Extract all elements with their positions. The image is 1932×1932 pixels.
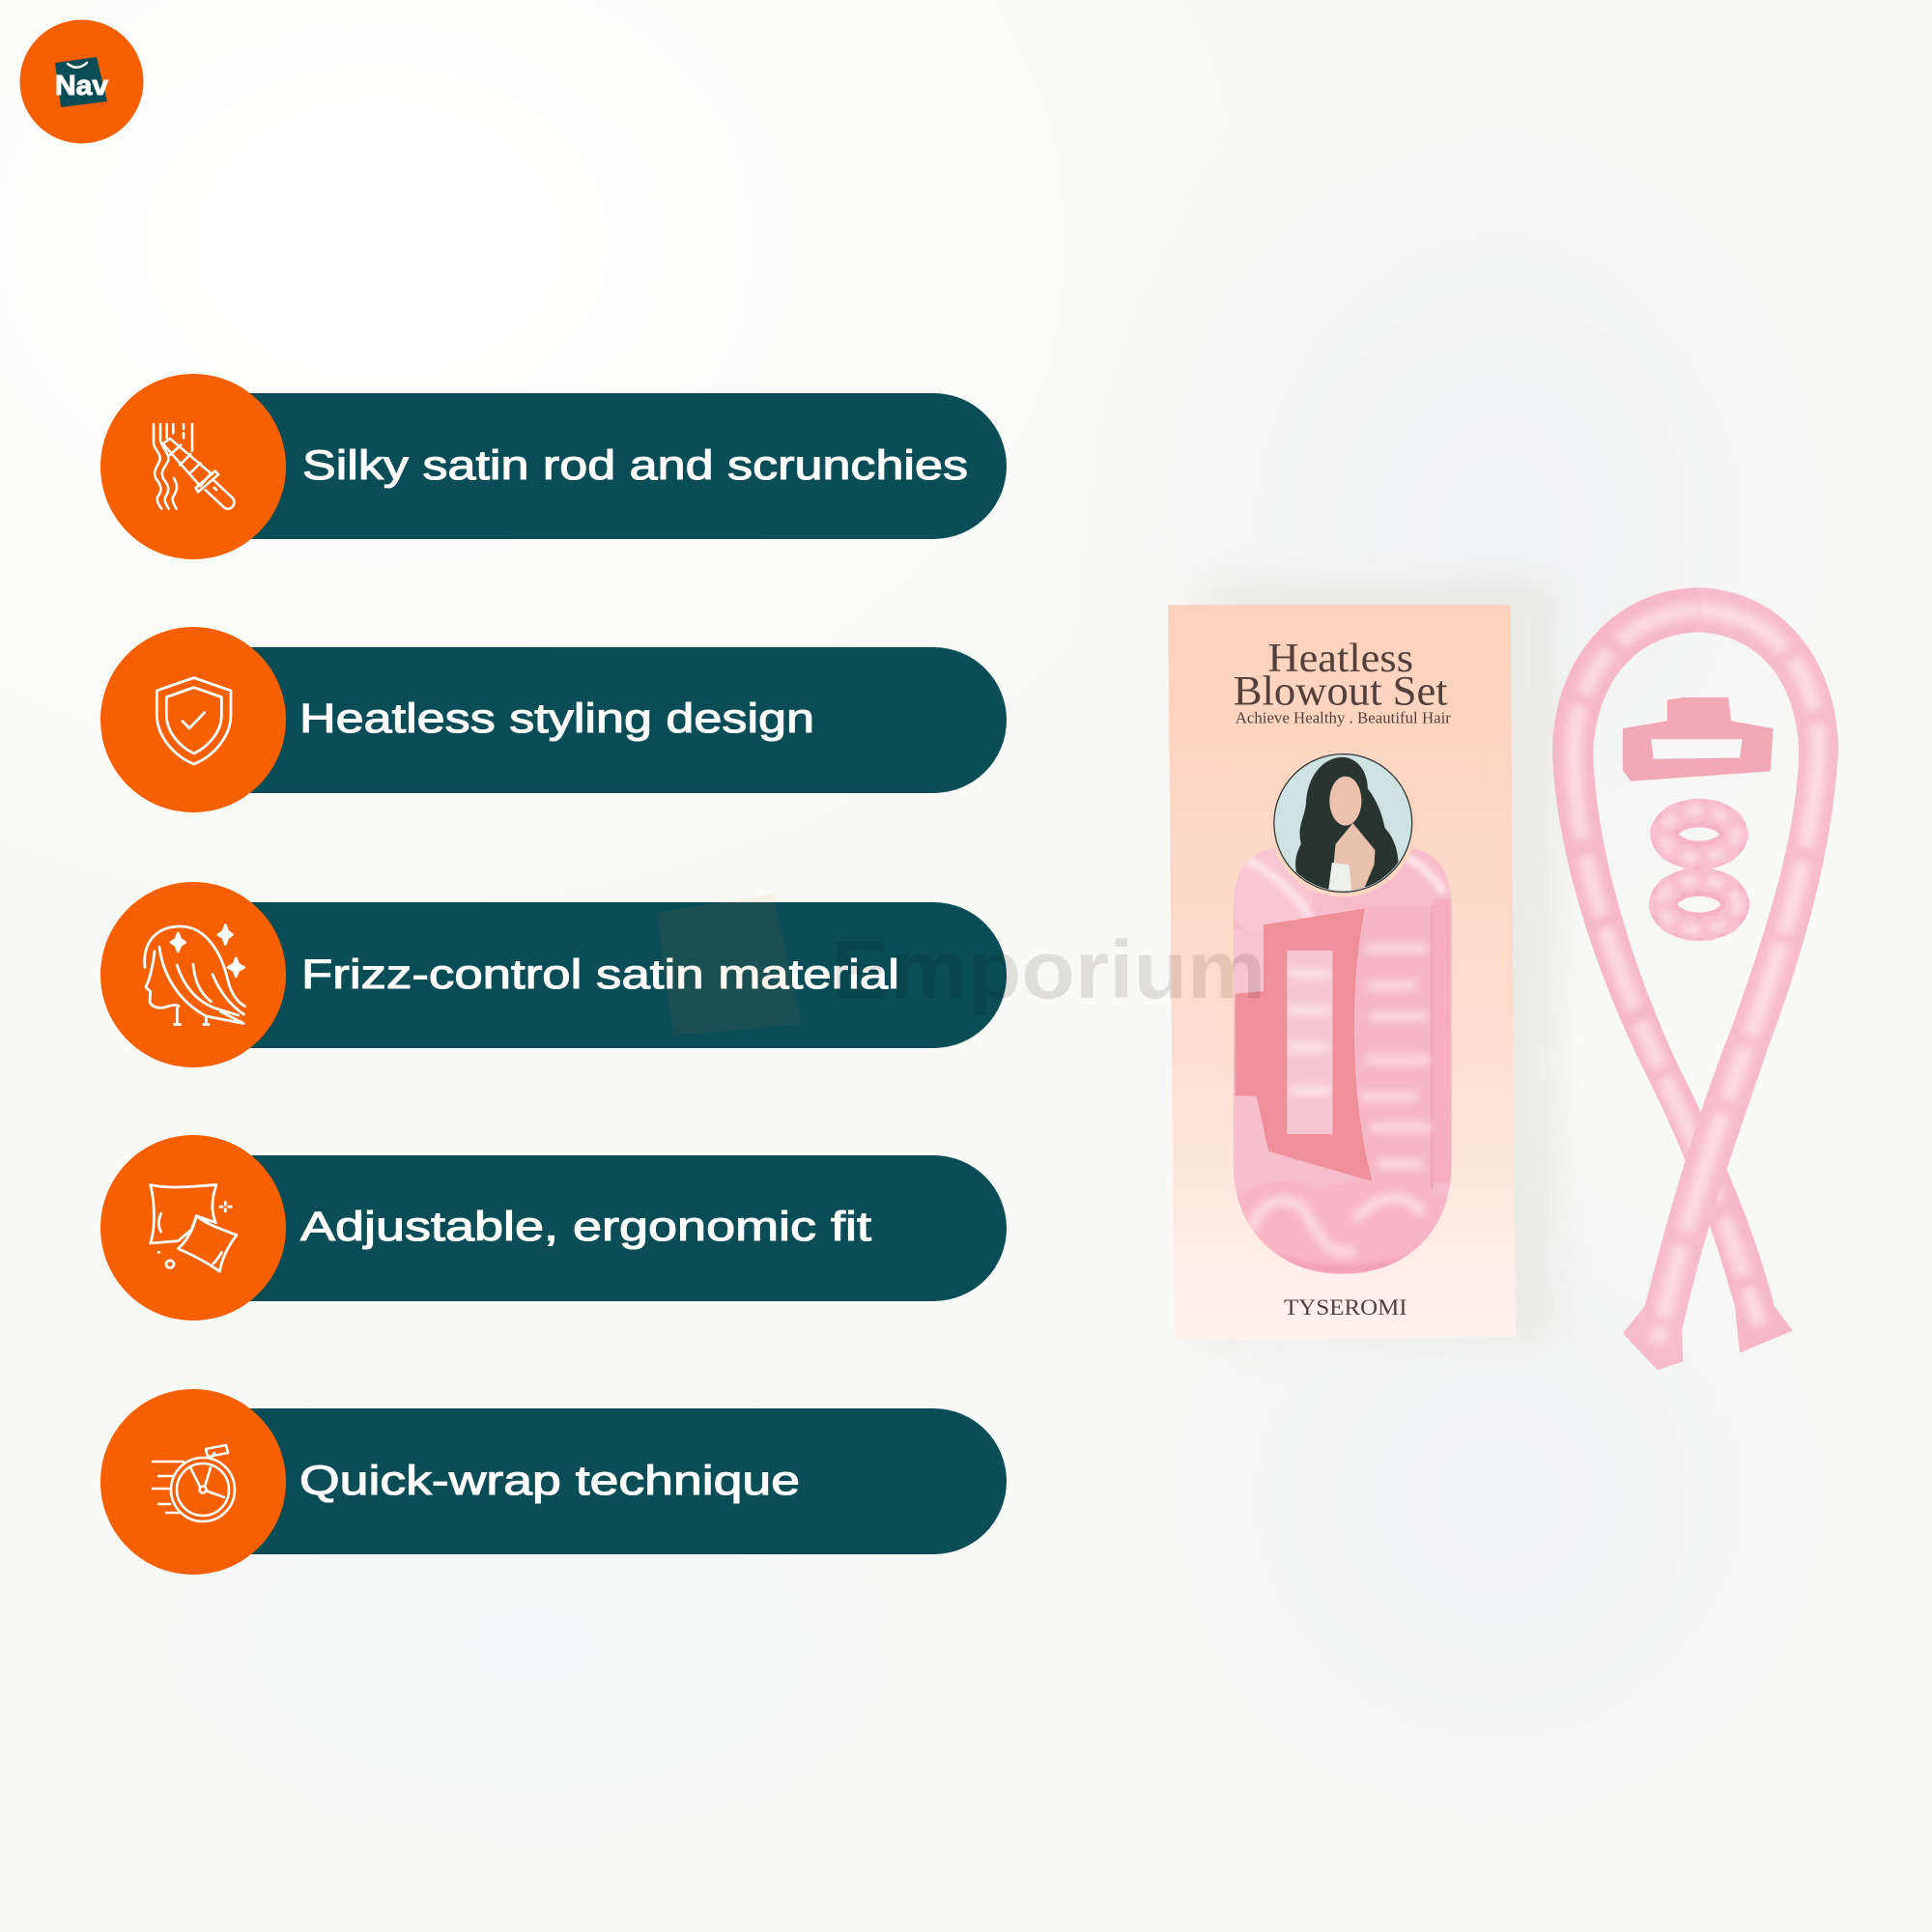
icon: curling rod with wavy hair	[154, 424, 234, 509]
pill bar	[174, 393, 1007, 539]
watermark bag	[657, 894, 802, 1036]
orange circle	[100, 1135, 286, 1321]
left strand	[1552, 587, 1793, 1352]
heading text: Frizz-control satin material	[301, 952, 899, 998]
pill bar	[174, 647, 1007, 793]
box title: Achieve Healthy . Beautiful Hair	[1236, 709, 1451, 727]
orange circle	[100, 1389, 286, 1575]
orange circle	[100, 882, 286, 1067]
heading text: Adjustable, ergonomic fit	[300, 1204, 871, 1250]
feature row 5	[100, 1389, 1007, 1575]
satin heatless rod	[1552, 587, 1838, 1370]
feature row 2	[100, 627, 1007, 812]
feature row 1	[100, 374, 1007, 559]
box title	[1234, 636, 1451, 727]
logo badge: Nav	[55, 71, 108, 101]
box brand: TYSEROMI	[1284, 1295, 1407, 1320]
feature row 4	[100, 1135, 1007, 1321]
heading text: Heatless styling design	[299, 696, 814, 742]
right strand	[1623, 587, 1838, 1370]
logo badge	[19, 19, 143, 143]
photo of woman	[1274, 754, 1412, 892]
product group	[1168, 579, 1838, 1370]
icon: hair profile with sparkles	[145, 925, 244, 1024]
box title: Blowout Set	[1234, 668, 1448, 715]
scrunchies	[1661, 810, 1737, 929]
heading text: Silky satin rod and scrunchies	[302, 442, 968, 489]
orange circle	[100, 374, 286, 559]
claw clip in box	[1236, 909, 1372, 1180]
pill bar	[174, 902, 1007, 1048]
icon: shield with check	[156, 678, 231, 764]
heading text: Quick-wrap technique	[299, 1458, 800, 1504]
bottom scrunchie	[1236, 1180, 1452, 1276]
photo ring	[1269, 750, 1417, 897]
folded satin rolls	[1225, 842, 1454, 1189]
icon: pillows	[151, 1185, 237, 1271]
watermark	[657, 894, 1265, 1036]
feature row 3	[100, 882, 1007, 1067]
satin window	[1225, 842, 1454, 1276]
icon: stopwatch	[153, 1445, 235, 1521]
pill bar	[174, 1155, 1007, 1301]
pill bar	[174, 1408, 1007, 1554]
shadow patch behind box	[1202, 579, 1559, 1343]
logo bag shape	[55, 57, 107, 107]
claw clip	[1624, 698, 1772, 780]
orange circle	[100, 627, 286, 812]
watermark word: Emporium	[831, 924, 1265, 1015]
product box	[1168, 605, 1516, 1341]
box title: Heatless	[1267, 636, 1413, 681]
